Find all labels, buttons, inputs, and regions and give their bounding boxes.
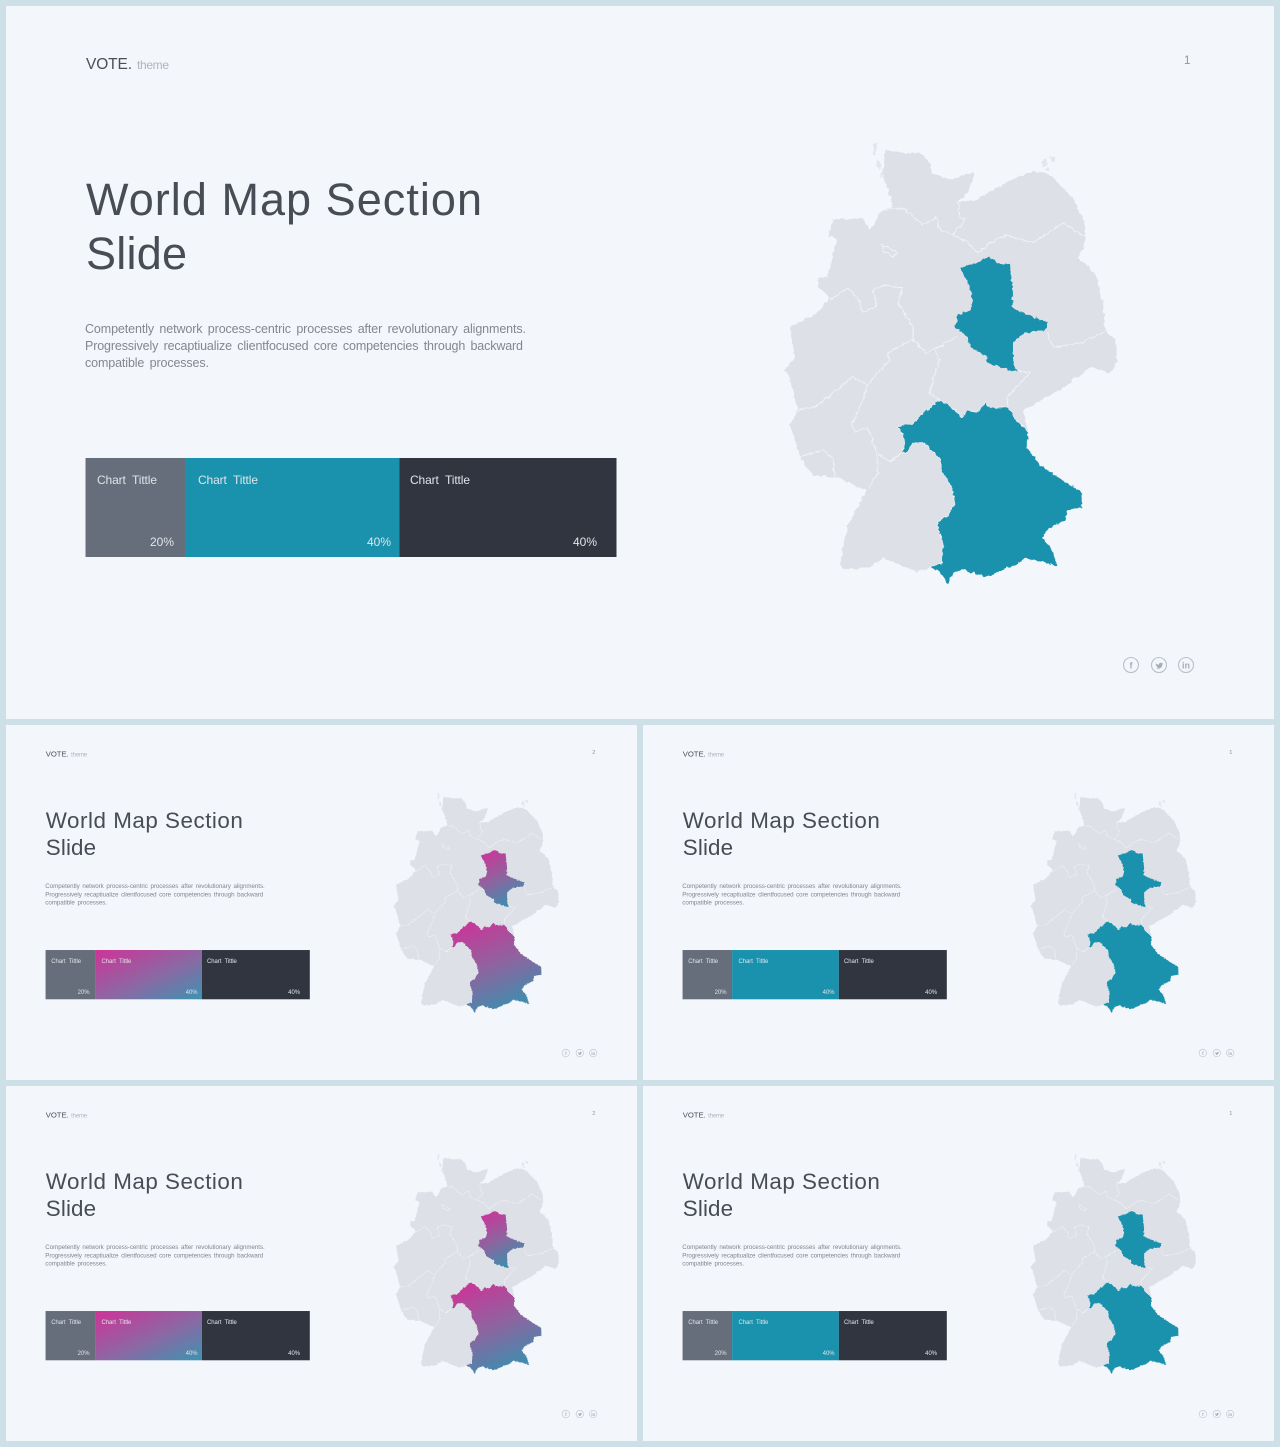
brand header: theme: [71, 752, 88, 758]
stacked bar chart: 40%: [288, 990, 301, 996]
slide panel 5: teal, bottom right: [643, 1086, 1274, 1441]
title: [86, 174, 482, 279]
stacked bar chart: [683, 1311, 947, 1360]
stacked bar chart: 40%: [573, 535, 597, 549]
title: World Map Section: [683, 808, 880, 833]
body text: Competently network process-centric processes after revolutionary alignments.: [682, 1244, 902, 1251]
title: [683, 1169, 880, 1221]
brand header: [683, 749, 725, 758]
title: [46, 1169, 243, 1221]
stacked bar chart: Chart Tittle: [739, 959, 769, 965]
body text: compatible processes.: [45, 1261, 107, 1268]
brand header: [46, 749, 88, 758]
stacked bar chart: 40%: [186, 1351, 198, 1357]
stacked bar chart: Chart Tittle: [51, 959, 82, 965]
map of Germany: [394, 793, 559, 1013]
stacked bar chart: 20%: [715, 990, 727, 996]
stacked bar chart: 20%: [78, 1351, 90, 1357]
body text: compatible processes.: [45, 900, 107, 907]
body text: Competently network process-centric processes after revolutionary alignments.: [45, 883, 265, 890]
slide panel 4: gradient, bottom left: [6, 1086, 637, 1441]
social icons: in: [591, 1412, 595, 1417]
body text: [682, 883, 902, 907]
title: Slide: [683, 835, 733, 860]
page number: 2: [592, 750, 595, 756]
social icons: f: [1202, 1051, 1204, 1056]
stacked bar chart: 40%: [925, 990, 938, 996]
slide panel 2: gradient, top left: [6, 725, 637, 1080]
social icons: in: [1228, 1412, 1232, 1417]
brand header: VOTE.: [46, 749, 69, 758]
stacked bar chart: 20%: [715, 1351, 727, 1357]
social icons: [1199, 1049, 1234, 1057]
social icons: [562, 1410, 597, 1418]
map of Germany: [785, 142, 1117, 585]
title: Slide: [46, 1196, 96, 1221]
social icons: f: [1202, 1412, 1204, 1417]
title: World Map Section: [46, 1169, 243, 1194]
social icons: in: [591, 1051, 595, 1056]
brand header: theme: [71, 1113, 88, 1119]
page number: 1: [1229, 1111, 1232, 1117]
stacked bar chart: [46, 1311, 310, 1360]
social icons: f: [1130, 660, 1134, 670]
stacked bar chart: Chart Tittle: [844, 959, 875, 965]
stacked bar chart: 40%: [823, 1351, 835, 1357]
brand header: VOTE.: [46, 1110, 69, 1119]
body text: Progressively recaptiualize clientfocused core competencies through backward: [45, 1252, 264, 1259]
page number: 1: [1184, 55, 1190, 67]
brand header: VOTE.: [683, 1110, 706, 1119]
stacked bar chart: Chart Tittle: [51, 1320, 82, 1326]
stacked bar chart: Chart Tittle: [844, 1320, 875, 1326]
stacked bar chart: 40%: [288, 1351, 301, 1357]
title: World Map Section: [86, 174, 482, 225]
stacked bar chart: Chart Tittle: [198, 473, 258, 487]
body text: [45, 1244, 265, 1268]
page number: 1: [1229, 750, 1232, 756]
stacked bar chart: Chart Tittle: [207, 1320, 238, 1326]
stacked bar chart: 40%: [823, 990, 835, 996]
title: [683, 808, 880, 860]
map of Germany: [1031, 1154, 1196, 1374]
social icons: in: [1182, 660, 1190, 670]
stacked bar chart: 20%: [150, 535, 174, 549]
brand header: theme: [708, 752, 725, 758]
brand header: VOTE.: [86, 56, 132, 73]
title: Slide: [86, 228, 187, 279]
stacked bar chart: 40%: [367, 535, 391, 549]
stacked bar chart: Chart Tittle: [739, 1320, 769, 1326]
stacked bar chart: Chart Tittle: [688, 1320, 719, 1326]
stacked bar chart: 20%: [78, 990, 90, 996]
body text: Competently network process-centric processes after revolutionary alignments.: [682, 883, 902, 890]
map of Germany: [394, 1154, 559, 1374]
brand header: theme: [708, 1113, 725, 1119]
page number: 2: [592, 1111, 595, 1117]
body text: Progressively recaptiualize clientfocused core competencies through backward: [85, 339, 523, 353]
body text: compatible processes.: [682, 1261, 744, 1268]
stacked bar chart: [46, 950, 310, 999]
body text: compatible processes.: [85, 356, 209, 370]
body text: Progressively recaptiualize clientfocused core competencies through backward: [682, 891, 901, 898]
stacked bar chart: Chart Tittle: [410, 473, 470, 487]
brand header: theme: [137, 58, 169, 72]
brand header: [46, 1110, 88, 1119]
stacked bar chart: Chart Tittle: [102, 1320, 132, 1326]
title: Slide: [46, 835, 96, 860]
title: [46, 808, 243, 860]
body text: compatible processes.: [682, 900, 744, 907]
brand header: [683, 1110, 725, 1119]
body text: Competently network process-centric processes after revolutionary alignments.: [45, 1244, 265, 1251]
map of Germany: [1031, 793, 1196, 1013]
stacked bar chart: 40%: [925, 1351, 938, 1357]
stacked bar chart: [86, 458, 616, 557]
stacked bar chart: Chart Tittle: [97, 473, 157, 487]
stacked bar chart: 40%: [186, 990, 198, 996]
social icons: f: [565, 1051, 567, 1056]
social icons: f: [565, 1412, 567, 1417]
social icons: [1199, 1410, 1234, 1418]
title: Slide: [683, 1196, 733, 1221]
title: World Map Section: [46, 808, 243, 833]
brand header: [86, 56, 169, 73]
body text: [682, 1244, 902, 1268]
body text: Progressively recaptiualize clientfocused core competencies through backward: [45, 891, 264, 898]
body text: Competently network process-centric processes after revolutionary alignments.: [85, 322, 526, 336]
social icons: [1124, 658, 1194, 672]
title: World Map Section: [683, 1169, 880, 1194]
slide panel 1: main slide, teal: [6, 6, 1274, 719]
stacked bar chart: Chart Tittle: [207, 959, 238, 965]
stacked bar chart: Chart Tittle: [688, 959, 719, 965]
brand header: VOTE.: [683, 749, 706, 758]
body text: [45, 883, 265, 907]
body text: Progressively recaptiualize clientfocused core competencies through backward: [682, 1252, 901, 1259]
stacked bar chart: Chart Tittle: [102, 959, 132, 965]
slide panel 3: teal, top right: [643, 725, 1274, 1080]
body text: [85, 322, 526, 370]
stacked bar chart: [683, 950, 947, 999]
social icons: in: [1228, 1051, 1232, 1056]
social icons: [562, 1049, 597, 1057]
